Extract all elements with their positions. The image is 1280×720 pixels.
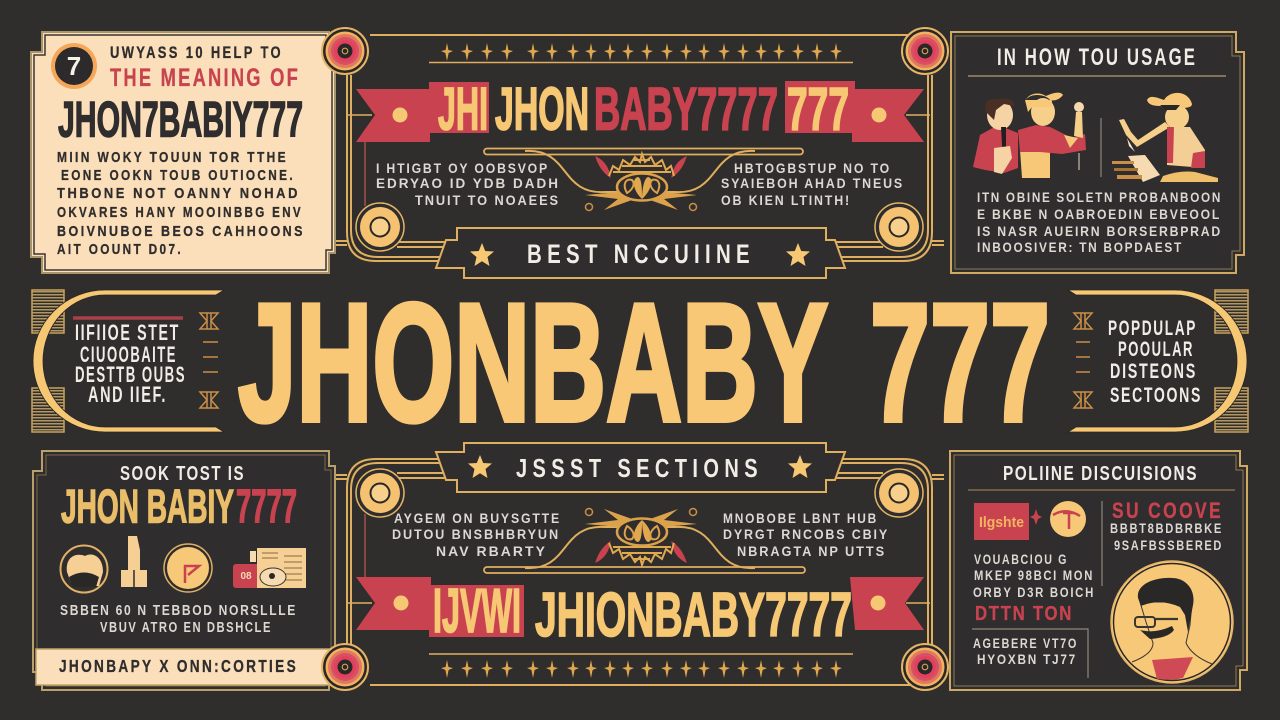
icon: T badge bbox=[1050, 501, 1086, 537]
text block: bottom center right: NBRAGTA NP UTTS bbox=[737, 544, 886, 559]
heading: in how tou usage: IN HOW TOU USAGE bbox=[997, 44, 1197, 71]
heading: best nccuiine: BEST NCCUIINE bbox=[527, 239, 755, 269]
banner: best bbox=[436, 228, 845, 278]
icon: star right bbox=[788, 455, 812, 478]
text block: right note: BBBT8BDBRBKE bbox=[1110, 521, 1223, 536]
text block: intro: EONE OOKN TOUB OUTIOCNE. bbox=[61, 167, 295, 184]
icon: documents: 08 bbox=[240, 571, 252, 582]
text block: usage: INBOOSIVER: TN BOPDAEST bbox=[977, 239, 1183, 255]
text block: top center left: EDRYAO ID YDB DADH bbox=[376, 176, 560, 191]
text block: top center right: OB KIEN LTINTH! bbox=[721, 193, 851, 208]
heading: soon test is: SOOK TOST IS bbox=[120, 463, 245, 485]
icon: tower bbox=[121, 536, 147, 587]
text block: bottom center left bbox=[392, 511, 561, 559]
illustration: people discussing bbox=[973, 93, 1218, 182]
icon: red label bbox=[974, 503, 1042, 540]
ribbon: bottom bbox=[356, 577, 924, 650]
panel: how to usage bbox=[951, 32, 1244, 273]
icon: documents bbox=[233, 548, 306, 588]
middle person bbox=[1018, 93, 1086, 178]
text block: middle left: IIFIIOE STET bbox=[75, 320, 180, 345]
icon: portrait bbox=[1111, 561, 1233, 683]
text block: right note: 9SAFBSSBERED bbox=[1114, 538, 1223, 553]
icon: number 7 badge bbox=[51, 43, 97, 89]
text block: bottom center left: NAV RBARTY bbox=[436, 544, 547, 559]
icon: hourglass bbox=[200, 313, 218, 408]
text block: top center left: TNUIT TO NOAEES bbox=[415, 193, 560, 208]
heading: jssst sections: JSSST SECTIONS bbox=[516, 453, 763, 483]
text block: bottom center right bbox=[723, 511, 889, 559]
text block: intro: THBONE NOT OANNY NOHAD bbox=[57, 185, 300, 202]
icon: hourglass right bbox=[1074, 313, 1092, 408]
banner: sections bbox=[436, 443, 845, 492]
text block: middle right: DISTEONS bbox=[1110, 360, 1197, 383]
ornament: bottom center bbox=[484, 508, 805, 573]
text block: see note: VBUV ATRO EN DBSHCLE bbox=[100, 620, 272, 636]
heading: discussions: POLIINE DISCUISIONS bbox=[1003, 463, 1198, 485]
text block: middle left: AND IIEF. bbox=[88, 382, 167, 407]
text block: middle right: POOULAR bbox=[1118, 338, 1194, 361]
text block: intro: MIIN WOKY TOUUN TOR TTHE bbox=[57, 149, 288, 166]
heading: ribbon title bottom: JHIONBABY7777 bbox=[535, 581, 852, 650]
text block: bracketed note bbox=[972, 629, 1088, 678]
center bottom frame bbox=[336, 459, 944, 685]
icon: star left bbox=[468, 455, 492, 478]
panel: soon test is bbox=[33, 451, 335, 690]
heading: ribbon title top: BABY7777 bbox=[594, 76, 778, 142]
text block: left note bbox=[973, 552, 1095, 600]
icon: star left bbox=[470, 243, 494, 266]
icon: P badge bbox=[164, 544, 212, 592]
text block: left note: MKEP 98BCI MON bbox=[974, 568, 1094, 583]
ornament: top center bbox=[484, 148, 803, 210]
ribbon: top bbox=[356, 76, 924, 142]
heading: so coove: SU COOVE bbox=[1112, 498, 1223, 523]
middle right bracket bbox=[1068, 290, 1248, 432]
icon: gold discs bbox=[356, 203, 923, 517]
panel: meaning of Jhonbaby777 bbox=[31, 32, 335, 273]
text block: usage bbox=[977, 189, 1222, 255]
text block: bracketed note: AGEBERE VT7O bbox=[973, 636, 1078, 651]
text block: intro: OKVARES HANY MOOINBBG ENV bbox=[57, 204, 303, 221]
center top frame bbox=[336, 35, 944, 261]
middle left bracket bbox=[32, 290, 224, 432]
heading: the meaning of: THE MEANING OF bbox=[110, 64, 300, 92]
right person bbox=[1112, 93, 1218, 182]
heading: ribbon title top: 777 bbox=[787, 76, 849, 142]
text block: left note: VOUABCIOU G bbox=[974, 552, 1068, 567]
text block: intro: AIT OOUNT D07. bbox=[57, 241, 183, 258]
text block: left note: ORBY D3R BOICH bbox=[973, 585, 1095, 600]
text block: middle right: POPDULAP bbox=[1108, 317, 1197, 340]
text block: bottom center right: DYRGT RNCOBS CBIY bbox=[723, 527, 889, 542]
heading: ribbon title bottom bbox=[433, 577, 852, 650]
heading: ribbon title top bbox=[438, 76, 849, 142]
bottom strip: opportunities: JHONBAPY X ONN:CORTIES bbox=[59, 656, 298, 676]
star row: top bbox=[429, 43, 853, 62]
text block: middle right bbox=[1108, 317, 1202, 407]
heading: jhon baby 7777: 7777 bbox=[236, 480, 297, 532]
text block: bottom center left: DUTOU BNSBHBRYUN bbox=[392, 527, 560, 542]
main title: 777 bbox=[870, 268, 1050, 456]
text block: usage: ITN OBINE SOLETN PROBANBOON bbox=[977, 189, 1222, 205]
text block: top center right: SYAIEBOH AHAD TNEUS bbox=[721, 176, 904, 191]
text block: usage: IS NASR AUEIRN BORSERBPRAD bbox=[977, 223, 1222, 239]
text block: see note: SBBEN 60 N TEBBOD NORSLLLE bbox=[60, 603, 297, 619]
text block: top center right bbox=[721, 161, 904, 208]
heading: dttn ton: DTTN TON bbox=[975, 603, 1073, 625]
text block: top center right: HBTOGBSTUP NO TO bbox=[734, 161, 891, 176]
panel: popular discussions bbox=[950, 451, 1247, 690]
text block: middle left: CIUOOBAITE bbox=[80, 342, 177, 367]
text block: middle left: DESTTB OUBS bbox=[75, 362, 186, 387]
text block: see note bbox=[60, 603, 297, 636]
text block: top center left: I HTIGBT OY OOBSVOP bbox=[376, 161, 549, 176]
heading: ways to help: UWYASS 10 HELP TO bbox=[110, 44, 283, 62]
text block: intro: BOIVNUBOE BEOS CAHHOONS bbox=[57, 223, 305, 240]
text block: bottom center right: MNOBOBE LBNT HUB bbox=[723, 511, 878, 526]
left person bbox=[973, 98, 1018, 174]
medallions bbox=[322, 28, 948, 690]
text block: bracketed note: HYOXBN TJ77 bbox=[977, 652, 1077, 667]
text block: middle right: SECTOONS bbox=[1110, 384, 1202, 407]
icon: face badge bbox=[60, 546, 108, 592]
text block: top center left bbox=[376, 161, 560, 208]
heading: ribbon title bottom: IJVWI bbox=[433, 577, 521, 646]
main title: JHONBABY bbox=[238, 268, 828, 456]
bottom strip: opportunities bbox=[36, 649, 330, 685]
heading: jhon baby 7777: JHON BABIY bbox=[61, 480, 234, 532]
text block: bottom center left: AYGEM ON BUYSGTTE bbox=[394, 511, 561, 526]
icon: star right bbox=[786, 243, 810, 266]
heading: ribbon title top: JHON bbox=[495, 76, 589, 142]
text block: usage: E BKBE N OABROEDIN EBVEOOL bbox=[977, 206, 1221, 222]
star row: bottom bbox=[429, 654, 853, 678]
icon: red label: Ilgshte bbox=[979, 514, 1024, 531]
text block: middle left bbox=[75, 320, 186, 407]
icon: number 7 badge: 7 bbox=[67, 51, 81, 81]
text block: intro bbox=[57, 149, 305, 258]
heading: jhon baby 777: JHON7BABIY777 bbox=[58, 92, 303, 148]
heading: ribbon title top: JHI bbox=[438, 76, 488, 142]
text block: right note bbox=[1110, 521, 1223, 553]
